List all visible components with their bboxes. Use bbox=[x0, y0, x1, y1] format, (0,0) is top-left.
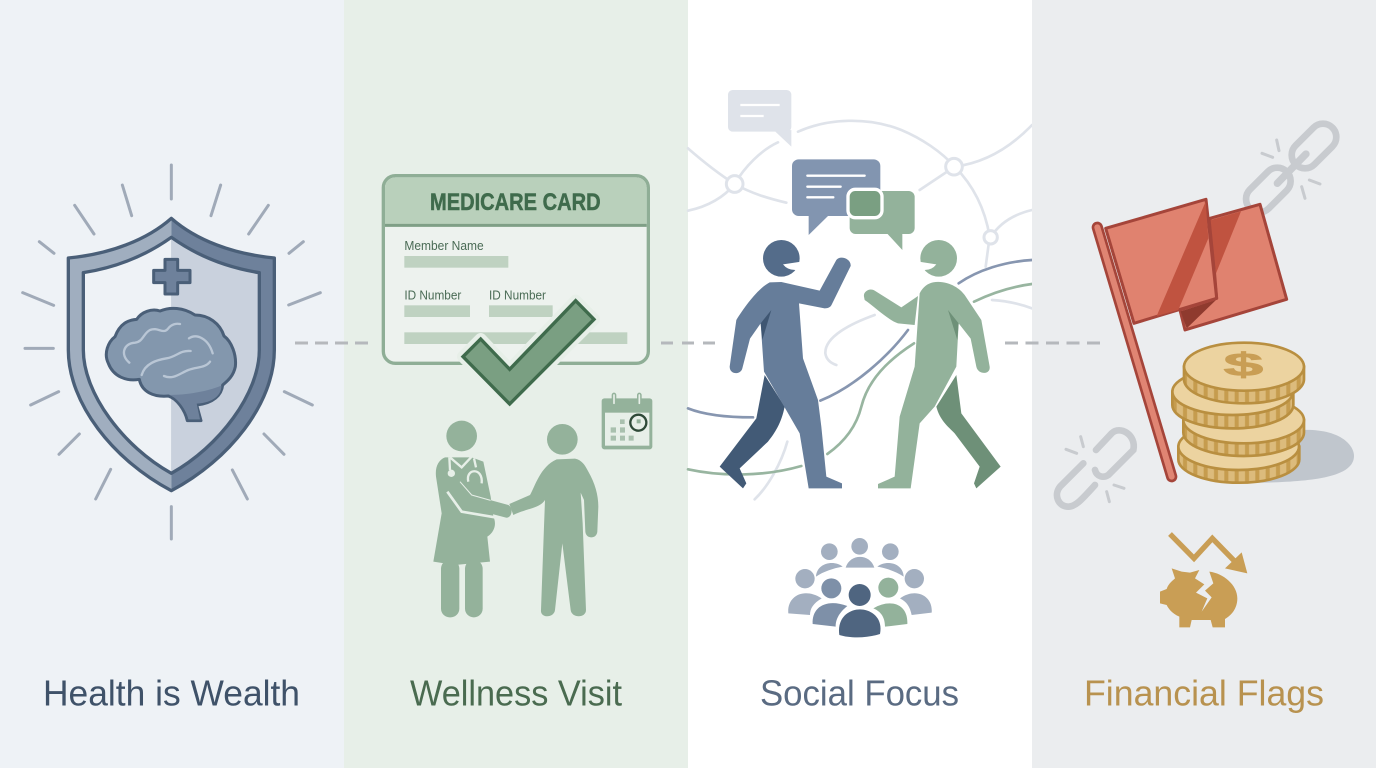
bubble: green bbox=[848, 189, 915, 250]
field: member name: Member Name bbox=[404, 239, 484, 253]
icon: red flag bbox=[1097, 199, 1287, 477]
icon: broken chain bottom bbox=[1057, 430, 1134, 507]
connector: social to financial bbox=[1005, 342, 1100, 344]
dollar sign: $ bbox=[1223, 346, 1263, 383]
icon: stack of coins bbox=[1172, 343, 1304, 483]
panel: social focus bbox=[688, 0, 1032, 768]
coin 3 bbox=[1183, 397, 1304, 456]
field: member name bbox=[404, 239, 508, 268]
icon: brain bbox=[106, 308, 236, 421]
field: id number second bbox=[489, 288, 553, 317]
panel: financial flags bbox=[1032, 0, 1376, 768]
heading: wellness visit: Wellness Visit bbox=[410, 672, 622, 714]
heading: social focus: Social Focus bbox=[760, 672, 959, 714]
icon: calendar bbox=[602, 395, 652, 449]
figure: patient bbox=[509, 424, 598, 616]
icon: crowd of people bbox=[788, 538, 932, 637]
heading: financial flags: Financial Flags bbox=[1084, 672, 1324, 714]
icon: check mark bbox=[463, 301, 594, 404]
icon: medical cross bbox=[154, 259, 190, 294]
figure: blue person talking bbox=[720, 240, 851, 488]
panel: health is wealth bbox=[0, 0, 344, 768]
icon: broken piggy bank with falling arrow bbox=[1160, 534, 1247, 627]
field: id number bbox=[404, 288, 470, 317]
field: id number second: ID Number bbox=[489, 288, 546, 302]
field: blank line bbox=[404, 332, 627, 344]
connector: health to wellness bbox=[295, 342, 370, 344]
card title: MEDICARE CARD bbox=[430, 189, 601, 216]
figure: doctor bbox=[433, 421, 512, 617]
bubble: blue bbox=[792, 159, 880, 235]
icon: radiating rays bbox=[23, 165, 320, 539]
figure: green person talking bbox=[864, 240, 1001, 488]
medicare card bbox=[383, 176, 648, 404]
connector: wellness to social bbox=[661, 342, 716, 344]
icon: doctor and patient handshake bbox=[433, 421, 598, 617]
panel: wellness visit bbox=[344, 0, 688, 768]
field: id number: ID Number bbox=[404, 288, 461, 302]
heading: health is wealth: Health is Wealth bbox=[43, 672, 300, 714]
bubble: grey bbox=[728, 90, 791, 147]
icon: speech bubbles bbox=[728, 90, 915, 250]
coin 4 bbox=[1178, 423, 1299, 483]
icon: coin shadow bbox=[1250, 430, 1354, 483]
icon: shield with brain bbox=[68, 218, 274, 491]
network lines bbox=[688, 121, 1032, 499]
icon: broken chain top bbox=[1241, 118, 1342, 218]
flag pole bbox=[1097, 227, 1172, 477]
coin 2 bbox=[1172, 368, 1293, 428]
coin 1 bbox=[1184, 343, 1304, 403]
